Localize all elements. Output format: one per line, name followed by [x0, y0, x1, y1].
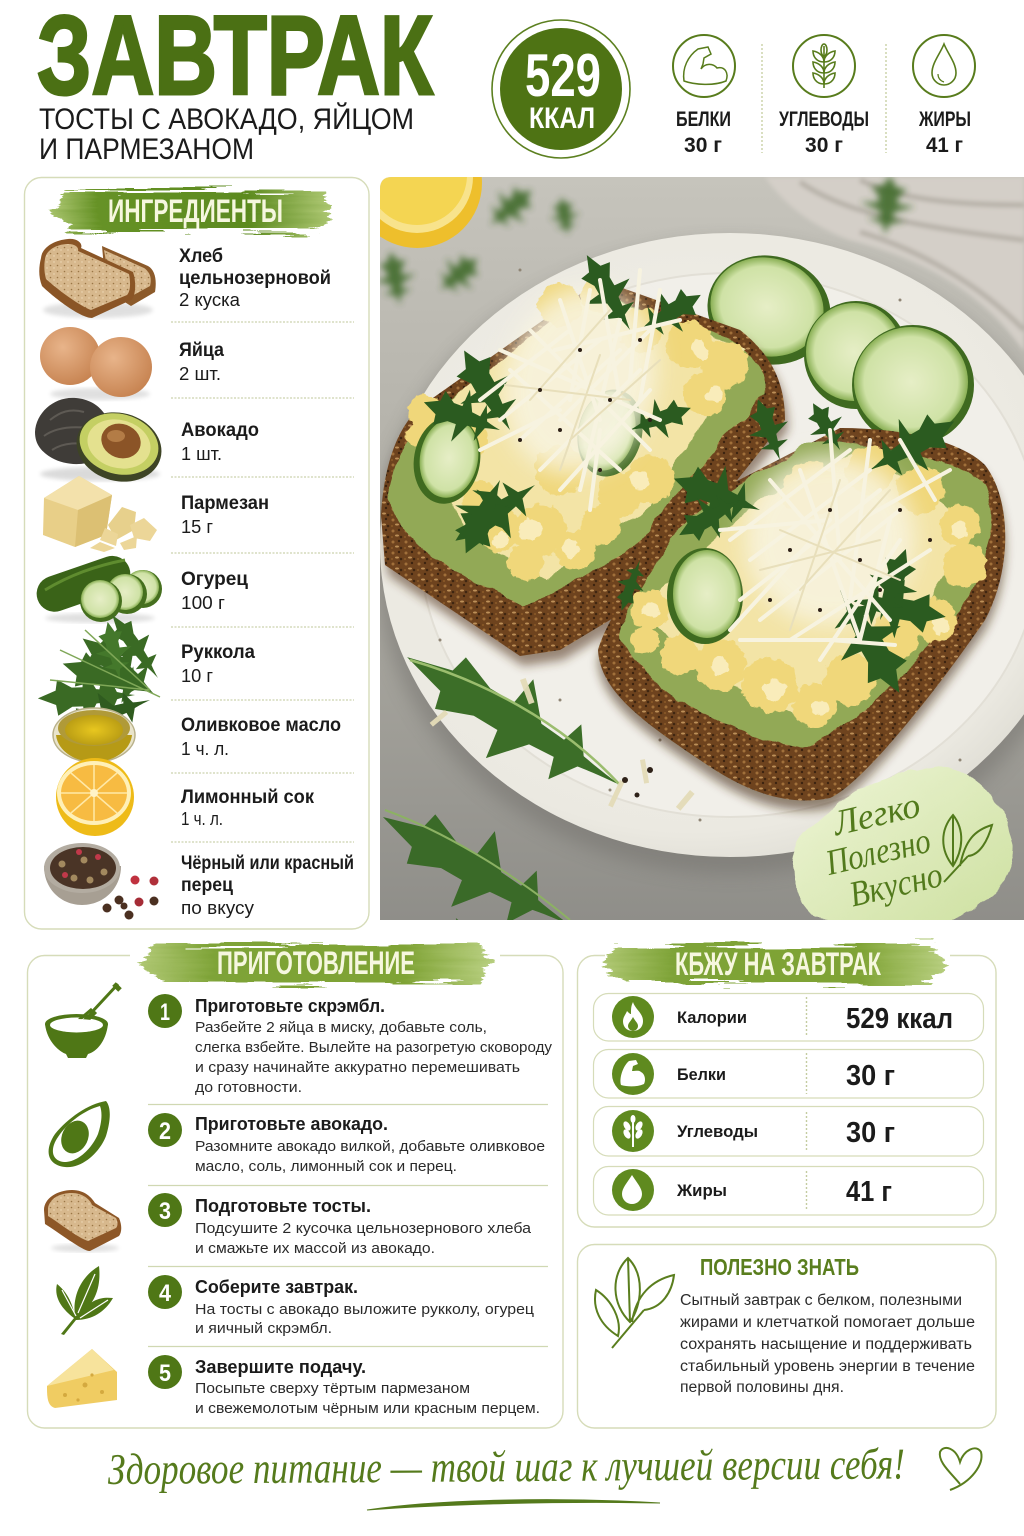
row: protein — [594, 1050, 984, 1098]
icon: lemon — [56, 758, 134, 836]
step 5: и свежемолотым чёрным или красным перцем. — [195, 1400, 540, 1417]
macro: protein: 30 г — [684, 134, 722, 157]
ingredient: eggs: 2 шт. — [179, 364, 221, 384]
icon: olive oil — [53, 708, 135, 762]
step 3: Подготовьте тосты. — [195, 1196, 371, 1216]
step 2: Разомните авокадо вилкой, добавьте оливковое — [195, 1138, 545, 1155]
heading: ingredients: ИНГРЕДИЕНТЫ — [108, 193, 283, 229]
step 4 — [148, 1275, 534, 1337]
step 4: и яичный скрэмбл. — [195, 1320, 332, 1337]
icon: drop — [913, 35, 975, 97]
ingredient: parmesan: 15 г — [181, 517, 213, 537]
lemon slice — [380, 177, 482, 248]
panel: good to know — [578, 1244, 996, 1428]
heading: ingredients — [54, 191, 332, 231]
row: calories: 529 ккал — [846, 1003, 953, 1035]
icon: toast — [44, 1190, 121, 1252]
macro: fat — [913, 35, 975, 157]
heading: preparation: ПРИГОТОВЛЕНИЕ — [217, 945, 415, 981]
good to know text: сохранять насыщение и поддерживать — [680, 1336, 972, 1353]
step 3: Подсушите 2 кусочка цельнозернового хлеба — [195, 1220, 532, 1237]
ingredient: pepper — [181, 853, 354, 918]
row: calories: Калории — [677, 1008, 747, 1027]
badge: light, healthy, tasty — [792, 765, 1013, 927]
badge: light, healthy, tasty: Вкусно — [846, 854, 946, 914]
step 5 — [148, 1355, 540, 1417]
icon: heart — [940, 1448, 981, 1490]
icon: leaves — [56, 1266, 113, 1335]
icon: cucumber — [32, 551, 162, 623]
panel: ingredients — [24, 178, 369, 929]
subtitle: ТОСТЫ С АВОКАДО, ЯЙЦОМ — [39, 102, 414, 136]
ingredient: lemon juice: Лимонный сок — [181, 787, 314, 808]
underline swoosh — [367, 1500, 660, 1510]
row: carbs: Углеводы — [677, 1122, 758, 1141]
row: protein: Белки — [677, 1065, 726, 1084]
icon: bread — [39, 239, 156, 318]
ingredient: pepper: Чёрный или красный — [181, 853, 354, 874]
macro: protein — [673, 35, 735, 157]
ingredient: arugula — [181, 642, 255, 686]
right toast — [598, 428, 1005, 810]
ingredient: olive oil: 1 ч. л. — [181, 739, 229, 759]
step 1: слегка взбейте. Вылейте на разогретую сковороду — [195, 1039, 552, 1056]
panel: preparation — [28, 944, 563, 1428]
step 4: На тосты с авокадо выложите рукколу, огурец — [195, 1301, 534, 1318]
panel: good to know: ПОЛЕЗНО ЗНАТЬ — [700, 1254, 859, 1280]
ingredient: avocado: Авокадо — [181, 420, 259, 441]
icon: wheat — [793, 35, 855, 97]
calories badge — [492, 20, 630, 158]
calories badge: ККАЛ — [529, 102, 595, 135]
icon: bowl with whisk — [45, 984, 120, 1058]
ingredient: bread — [179, 246, 331, 310]
row: carbs — [594, 1106, 984, 1156]
ingredient: olive oil — [181, 715, 341, 759]
ingredient: bread: Хлеб — [179, 246, 223, 267]
row: fat: 41 г — [846, 1176, 892, 1208]
ingredient: arugula: 10 г — [181, 666, 213, 686]
badge: light, healthy, tasty: Полезно — [821, 820, 934, 883]
step 5: 5 — [159, 1360, 171, 1387]
macro: carbs — [779, 35, 869, 157]
step 1: Разбейте 2 яйца в миску, добавьте соль, — [195, 1019, 487, 1036]
icon: badge leaf — [943, 815, 992, 882]
hero photo: avocado toast plate — [352, 118, 1024, 998]
ingredient: lemon juice: 1 ч. л. — [181, 809, 223, 829]
ingredient: parmesan: Пармезан — [181, 493, 269, 514]
subtitle — [39, 102, 414, 166]
row: calories — [594, 994, 984, 1041]
row: fat — [594, 1166, 984, 1215]
macro: carbs: 30 г — [805, 134, 843, 157]
good to know text: жирами и клетчаткой помогает дольше — [680, 1314, 975, 1331]
calories badge: 529 — [525, 42, 601, 109]
step 3: 3 — [159, 1198, 171, 1225]
ingredient: lemon juice — [181, 787, 314, 829]
grated parmesan — [480, 270, 950, 660]
good to know text: первой половины дня. — [680, 1379, 844, 1396]
ingredient: avocado — [181, 420, 259, 464]
left toast — [381, 277, 788, 666]
ingredient: avocado: 1 шт. — [181, 444, 222, 464]
step 5: Посыпьте сверху тёртым пармезаном — [195, 1380, 470, 1397]
macro: protein: БЕЛКИ — [676, 108, 731, 131]
badge: light, healthy, tasty: Легко — [828, 784, 924, 843]
step 1: и сразу начинайте аккуратно перемешивать — [195, 1059, 520, 1076]
ingredient: arugula: Руккола — [181, 642, 255, 663]
soft parmesan mounds — [483, 269, 915, 625]
heading: nutrition — [605, 945, 945, 983]
step 4: Соберите завтрак. — [195, 1277, 358, 1297]
icon: cheese — [47, 1349, 117, 1408]
step 4: 4 — [159, 1280, 172, 1307]
arugula on toasts — [424, 255, 954, 693]
ingredient: eggs: Яйца — [179, 340, 224, 361]
icon: eggs — [40, 327, 152, 400]
subtitle: И ПАРМЕЗАНОМ — [39, 133, 254, 166]
ingredient: cucumber: Огурец — [181, 569, 248, 590]
step 1 — [148, 994, 552, 1096]
ingredient: parmesan — [181, 493, 269, 537]
row: fat: Жиры — [676, 1181, 727, 1200]
icon: herb leaves — [595, 1258, 674, 1348]
macro: fat: 41 г — [926, 134, 963, 157]
icon: arugula — [37, 604, 173, 750]
macro: fat: ЖИРЫ — [918, 108, 971, 131]
ingredient: bread: цельнозерновой — [179, 268, 331, 289]
step 3 — [148, 1193, 532, 1257]
step 2: Приготовьте авокадо. — [195, 1114, 388, 1134]
icon: muscle — [673, 35, 735, 97]
icon: avocado half — [49, 1101, 110, 1167]
heading: nutrition: КБЖУ НА ЗАВТРАК — [675, 946, 881, 982]
good to know text: Сытный завтрак с белком, полезными — [680, 1292, 962, 1309]
ingredient: pepper: перец — [181, 875, 233, 896]
icon: peppercorns — [44, 843, 158, 920]
ingredient: eggs — [179, 340, 224, 384]
ingredient: cucumber — [181, 569, 248, 613]
step 1: Приготовьте скрэмбл. — [195, 996, 385, 1016]
toast cucumbers — [407, 383, 743, 644]
ingredient: pepper: по вкусу — [181, 898, 254, 918]
bottom-left arugula — [383, 809, 570, 920]
step 1: 1 — [160, 999, 170, 1026]
icon: parmesan — [43, 476, 157, 552]
step 3: и смажьте их массой из авокадо. — [195, 1240, 435, 1257]
ingredient: cucumber: 100 г — [181, 593, 225, 613]
arugula on plate — [407, 657, 619, 785]
good to know text: стабильный уровень энергии в течение — [680, 1358, 975, 1375]
row: carbs: 30 г — [846, 1117, 895, 1149]
ingredient: olive oil: Оливковое масло — [181, 715, 341, 736]
macro: carbs: УГЛЕВОДЫ — [779, 108, 869, 131]
ingredient: bread: 2 куска — [179, 290, 241, 310]
icon: avocado — [35, 398, 169, 491]
good to know text — [680, 1292, 975, 1396]
step 2 — [148, 1113, 545, 1175]
step 5: Завершите подачу. — [195, 1357, 366, 1377]
step 2: масло, соль, лимонный сок и перец. — [195, 1158, 457, 1175]
step 2: 2 — [159, 1118, 171, 1145]
panel: nutrition — [578, 945, 996, 1227]
step 1: до готовности. — [195, 1079, 302, 1096]
cucumber slices on plate — [708, 255, 974, 438]
row: protein: 30 г — [846, 1060, 895, 1092]
cracked pepper — [518, 338, 932, 798]
